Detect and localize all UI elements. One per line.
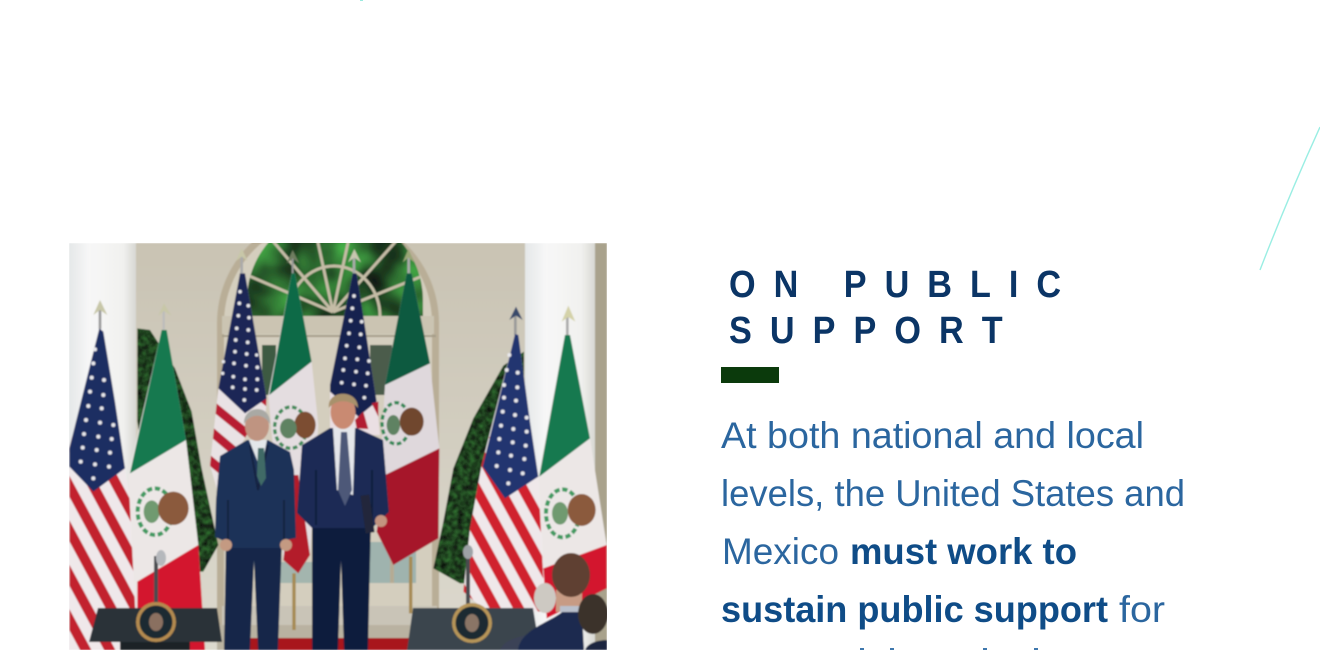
left flags group <box>69 250 319 650</box>
body text <box>721 415 1185 630</box>
mexican flag far left <box>128 330 205 650</box>
heading: on public support: ON PUBLIC <box>729 262 1061 305</box>
right podium with presidential seal <box>407 545 540 650</box>
back wall <box>135 243 526 650</box>
clipped tops of the next text line <box>860 648 1038 650</box>
green accent bar <box>721 367 779 383</box>
body text: Mexico <box>722 531 839 572</box>
man on left in navy suit <box>215 409 296 650</box>
audience in foreground <box>500 553 608 650</box>
us flag centre-right <box>330 273 380 435</box>
arched doorway with garden window <box>217 212 439 640</box>
decorative teal diagonal line: top right <box>1260 127 1320 270</box>
body text: At both national and local <box>721 415 1144 456</box>
columns <box>69 243 595 650</box>
left podium with presidential seal <box>89 550 222 650</box>
man on right in navy suit <box>297 394 389 650</box>
finials <box>93 248 299 330</box>
mexican flag centre-right <box>377 273 439 565</box>
flagpole <box>409 557 412 613</box>
body text: must work to <box>850 531 1077 572</box>
right column edge wall <box>595 243 607 650</box>
flagpole <box>292 573 296 630</box>
right flags group <box>329 248 607 619</box>
hedge right <box>433 352 524 583</box>
hedge left <box>137 328 218 572</box>
heading: on public support: SUPPORT <box>729 308 1003 351</box>
us flag far right <box>462 334 545 612</box>
mexican flag far right <box>538 335 607 618</box>
body text: levels, the United States and <box>721 473 1185 514</box>
floor and red carpet <box>217 625 427 650</box>
finials <box>348 249 575 335</box>
us flag centre-left <box>209 272 268 488</box>
us flag far left <box>69 328 136 650</box>
photo: leaders standing between US and Mexican flags in the Rose Garden <box>69 243 607 650</box>
body text: sustain public support <box>721 589 1108 630</box>
heading: on public support <box>729 262 1061 351</box>
body text: for <box>1119 589 1165 630</box>
mexican flag centre-left <box>268 273 318 573</box>
